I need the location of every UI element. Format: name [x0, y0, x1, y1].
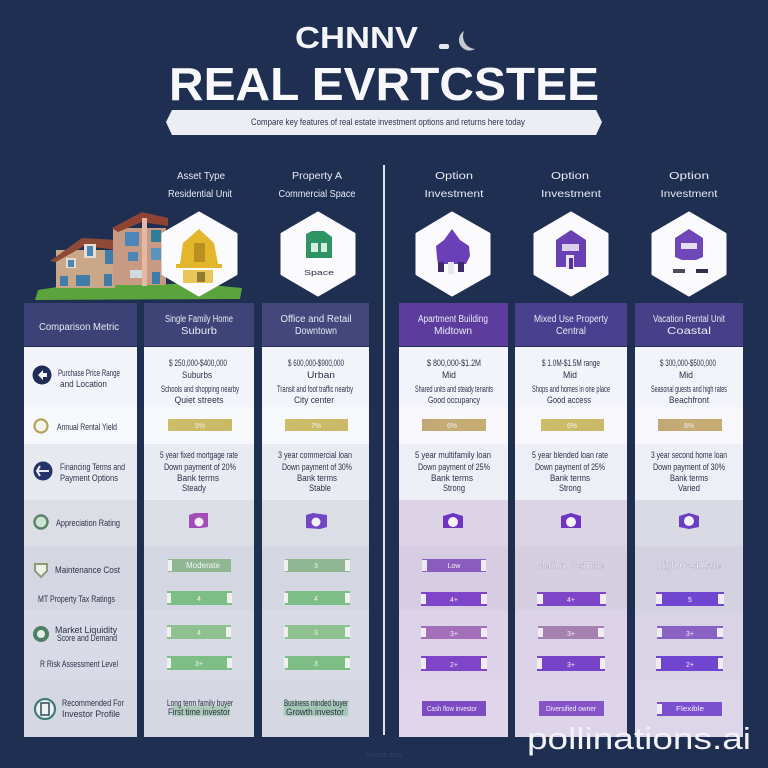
- row label: terms: [60, 462, 125, 483]
- row label: summary: Investor Profile: [62, 709, 120, 719]
- row label: liquidity: Score and Demand: [57, 633, 117, 643]
- terms text: 5 year fixed mortgage rate: [160, 450, 238, 460]
- price text: Shared units and steady tenants: [415, 384, 493, 394]
- liquidity bar: [284, 625, 350, 639]
- row label: liquidity: Market Liquidity: [55, 625, 117, 635]
- price text: $ 600,000-$900,000: [288, 358, 344, 368]
- column captions: Option: [551, 171, 589, 182]
- terms text: 3 year second home loan: [651, 450, 727, 460]
- row label: risk: R Risk Assessment Level: [40, 659, 118, 669]
- moon icon: [439, 31, 475, 51]
- header cell: Mixed Use Property: [534, 314, 608, 325]
- price text: Schools and shopping nearby: [161, 384, 239, 394]
- maintenance bar: Low: [448, 563, 461, 570]
- summary tag: [539, 701, 604, 716]
- terms text: Strong: [443, 483, 465, 493]
- footer note: Source data: [366, 752, 402, 759]
- risk bar: [421, 656, 487, 671]
- row label: liquidity: [55, 625, 117, 643]
- icon: green building badge: [282, 213, 354, 295]
- house illustration: [35, 212, 242, 300]
- header cell: Office and Retail: [280, 314, 352, 325]
- row backgrounds: [24, 347, 137, 737]
- row label: tax: MT Property Tax Ratings: [38, 594, 115, 604]
- liquidity bar: 3+: [686, 631, 694, 638]
- column captions: Option: [669, 171, 709, 182]
- terms text: Bank terms: [297, 473, 337, 483]
- price text: Transit and foot traffic nearby: [277, 384, 353, 394]
- price text: $ 800,000-$1.2M: [427, 358, 481, 368]
- panel: row labels column: [24, 303, 137, 737]
- icon: green ring: [34, 516, 48, 528]
- panel: column 4: [515, 303, 627, 737]
- terms text: [278, 450, 352, 493]
- row label: yield: Annual Rental Yield: [57, 422, 117, 432]
- row label: summary: Recommended For: [62, 698, 124, 708]
- header cell: [144, 303, 254, 346]
- maintenance label: Medium Cost Rate: [538, 560, 604, 572]
- row backgrounds: [515, 347, 627, 737]
- row label: location: [58, 368, 120, 389]
- row backgrounds: [144, 347, 254, 737]
- maintenance bar: [168, 559, 231, 572]
- column captions: Option: [435, 171, 473, 182]
- yield bar: [541, 419, 604, 431]
- icon: gold ring: [34, 420, 48, 432]
- risk bar: [284, 656, 350, 670]
- header cell: [515, 303, 627, 346]
- yield bar: 7%: [311, 423, 321, 430]
- liquidity bar: 3: [314, 630, 318, 637]
- terms text: Down payment of 20%: [164, 462, 236, 472]
- header cell: Downtown: [295, 326, 337, 337]
- tax bar: [284, 591, 350, 605]
- terms text: Down payment of 25%: [418, 462, 490, 472]
- rating icon: [189, 513, 208, 528]
- terms text: [415, 450, 491, 493]
- summary tag: [422, 701, 486, 716]
- center divider: [383, 165, 385, 735]
- maintenance bar: 3: [314, 563, 318, 570]
- price text: Suburbs: [182, 370, 212, 380]
- summary tag: Flexible: [676, 706, 704, 713]
- eyebrow heading: CHNNV: [295, 20, 418, 55]
- tax bar: [537, 592, 606, 606]
- maintenance bar: Moderate: [186, 561, 221, 570]
- terms text: [651, 450, 727, 493]
- row label: terms: Payment Options: [60, 473, 118, 483]
- tax bar: 4+: [450, 597, 458, 604]
- tax bar: [421, 592, 487, 606]
- panel: column 1: [144, 303, 254, 737]
- terms text: [532, 450, 608, 493]
- terms text: Stable: [309, 483, 331, 493]
- terms text: 5 year multifamily loan: [415, 450, 491, 460]
- summary tag: First time investor: [168, 707, 230, 717]
- risk bar: 3+: [567, 662, 575, 669]
- header cell: Vacation Rental Unit: [653, 314, 725, 325]
- header cell: Coastal: [667, 326, 711, 337]
- summary tag: [284, 698, 348, 717]
- column captions: Asset Type: [177, 171, 225, 182]
- terms text: Varied: [678, 483, 700, 493]
- icon: purple tree badge: [417, 213, 489, 295]
- price text: Mid: [442, 370, 456, 380]
- liquidity bar: [167, 625, 231, 639]
- maintenance bar: [284, 559, 350, 572]
- price text: Urban: [307, 370, 335, 380]
- terms text: Bank terms: [550, 473, 590, 483]
- title: [169, 20, 599, 110]
- summary tag: [657, 702, 722, 716]
- tax bar: 5: [688, 597, 692, 604]
- yield bar: [168, 419, 232, 431]
- column captions: Investment: [541, 189, 601, 200]
- maintenance bar: [422, 559, 486, 572]
- column captions: [168, 171, 718, 200]
- price text: $ 1.0M-$1.5M range: [542, 358, 600, 368]
- terms text: Strong: [559, 483, 581, 493]
- risk bar: 3+: [195, 661, 203, 668]
- yield bar: 6%: [567, 423, 577, 430]
- price text: Good occupancy: [428, 395, 480, 405]
- icon: gold house badge: [163, 213, 236, 295]
- row label: location: Purchase Price Range: [58, 368, 120, 378]
- terms text: Bank terms: [431, 473, 473, 483]
- risk bar: 3: [314, 661, 318, 668]
- price text: Good access: [547, 395, 591, 405]
- rating icon: [561, 513, 581, 528]
- row label: summary: [62, 698, 124, 719]
- rating icon: [306, 513, 327, 529]
- price text: [651, 358, 727, 405]
- risk bar: [537, 656, 605, 671]
- price text: Mid: [679, 370, 693, 380]
- risk bar: 2+: [450, 662, 458, 669]
- header cell: Central: [556, 326, 586, 337]
- price text: Beachfront: [669, 395, 709, 405]
- column captions: Investment: [660, 189, 718, 200]
- terms text: 3 year commercial loan: [278, 450, 352, 460]
- tax bar: 4+: [567, 597, 575, 604]
- liquidity bar: 4: [197, 630, 201, 637]
- risk bar: [656, 656, 723, 671]
- terms text: 5 year blended loan rate: [532, 450, 608, 460]
- terms text: [160, 450, 238, 493]
- price text: $ 300,000-$500,000: [660, 358, 716, 368]
- row label: terms: Financing Terms and: [60, 462, 125, 472]
- rating icon: [679, 513, 699, 529]
- terms text: Down payment of 30%: [653, 462, 725, 472]
- liquidity bar: 3+: [567, 631, 575, 638]
- row label: appreciation: Appreciation Rating: [56, 518, 120, 528]
- liquidity bar: [538, 626, 604, 639]
- terms text: Down payment of 30%: [282, 462, 352, 472]
- column captions: Property A: [292, 171, 342, 182]
- row backgrounds: [262, 347, 369, 737]
- header cell: Single Family Home: [165, 314, 233, 325]
- yield bar: [285, 419, 348, 431]
- header cell: [262, 303, 369, 346]
- summary tag: [167, 698, 233, 717]
- summary tag: Cash flow investor: [427, 706, 478, 713]
- row label: maintenance: Maintenance Cost: [55, 565, 120, 575]
- price text: Quiet streets: [174, 395, 224, 405]
- yield bar: [658, 419, 722, 431]
- terms text: Steady: [182, 483, 206, 493]
- column captions: Residential Unit: [168, 189, 232, 200]
- summary tag: Growth investor: [286, 707, 344, 717]
- terms text: Bank terms: [177, 473, 219, 483]
- header cell: [24, 303, 137, 346]
- yield bar: 6%: [447, 423, 457, 430]
- header cell: Apartment Building: [418, 314, 488, 325]
- icon: green badge: [33, 626, 49, 642]
- header cell: Suburb: [181, 326, 217, 337]
- column captions: Investment: [424, 189, 484, 200]
- summary tag: Business minded buyer: [284, 698, 348, 708]
- terms text: Down payment of 25%: [535, 462, 605, 472]
- maintenance label: High Cost Rate: [657, 560, 721, 572]
- panel: column 2: [262, 303, 369, 737]
- header cell: [399, 303, 508, 346]
- yield bar: 8%: [684, 423, 694, 430]
- summary tag: Long term family buyer: [167, 698, 233, 708]
- yield bar: [422, 419, 486, 431]
- price text: $ 250,000-$400,000: [169, 358, 227, 368]
- row backgrounds: [635, 347, 743, 737]
- liquidity bar: [421, 626, 487, 639]
- price text: [161, 358, 239, 405]
- column captions: Commercial Space: [278, 189, 356, 200]
- tax bar: 4: [314, 596, 318, 603]
- header cell: Midtown: [434, 326, 472, 337]
- terms text: Bank terms: [670, 473, 708, 483]
- panel: column 5: [635, 303, 743, 737]
- subtitle ribbon: [166, 110, 602, 135]
- tax bar: [656, 592, 724, 606]
- icon: shield: [35, 564, 47, 577]
- header cell: [635, 303, 743, 346]
- header cell: Comparison Metric: [39, 322, 119, 333]
- risk bar: [167, 656, 232, 670]
- icon: document badge: [35, 699, 55, 719]
- tax bar: 4: [197, 596, 201, 603]
- icon: arrow circle: [32, 366, 52, 384]
- price text: City center: [294, 395, 334, 405]
- panel: column 3: [399, 303, 508, 737]
- tax bar: [167, 591, 232, 605]
- row backgrounds: [399, 347, 508, 737]
- watermark: pollinations.ai: [527, 721, 751, 756]
- row label: location: and Location: [60, 379, 107, 389]
- price text: Mid: [563, 370, 577, 380]
- price text: [532, 358, 610, 405]
- icon: purple home badge: [653, 213, 725, 295]
- price text: Shops and homes in one place: [532, 384, 610, 394]
- rating icon: [443, 513, 463, 528]
- risk bar: 2+: [686, 662, 694, 669]
- summary tag: Diversified owner: [546, 706, 597, 713]
- price text: [277, 358, 353, 405]
- yield bar: 5%: [195, 423, 205, 430]
- icon: purple house badge: [535, 213, 607, 295]
- icon: green building badge: Space: [304, 270, 334, 277]
- main heading: REAL EVRTCSTEE: [169, 58, 599, 110]
- liquidity bar: 3+: [450, 631, 458, 638]
- icon: G circle: [34, 462, 52, 480]
- liquidity bar: [657, 626, 723, 639]
- subtitle ribbon: Compare key features of real estate investment options and returns here today: [251, 117, 525, 127]
- price text: [415, 358, 493, 405]
